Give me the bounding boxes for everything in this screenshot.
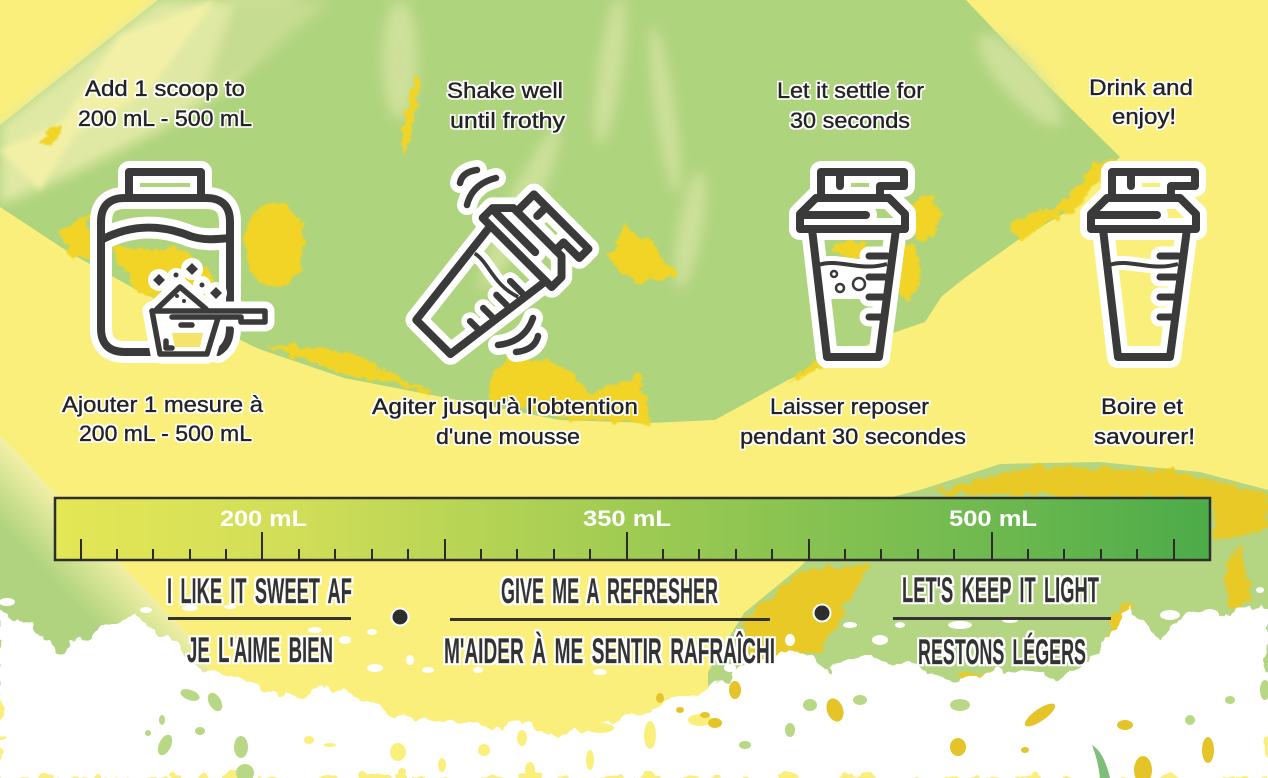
text: step 4 English: enjoy! — [1112, 104, 1176, 129]
background: green drip — [1092, 745, 1110, 778]
background: orange patches on peel — [38, 73, 1118, 423]
background: lime peel top — [0, 0, 1120, 423]
background: coloured splatter drops — [145, 680, 1268, 778]
taste label: light — [893, 571, 1111, 672]
step 3: settle — [740, 78, 966, 449]
taste label: refresher — [444, 572, 775, 671]
text: step 4 English — [1089, 75, 1193, 129]
icon: shaker with bubbles — [800, 172, 905, 357]
text: step 2 French: d'une mousse — [436, 424, 580, 449]
text: step 3 French — [740, 394, 966, 449]
taste label: sweet: JE L'AIME BIEN — [187, 631, 333, 670]
marker dot: left — [392, 608, 408, 626]
icon: jar with scoop — [101, 172, 265, 354]
text: step 2 English: until frothy — [450, 108, 565, 133]
taste label: refresher: GIVE ME A REFRESHER — [501, 572, 718, 611]
text: step 2 French — [372, 394, 638, 449]
taste label: light: RESTONS LÉGERS — [918, 632, 1086, 672]
label: 500 mL: 500 mL — [949, 506, 1037, 531]
marker dot: right — [814, 604, 830, 622]
ruler scale — [55, 498, 1210, 560]
text: step 1 English: Add 1 scoop to — [85, 76, 245, 101]
text: step 3 French: pendant 30 secondes — [740, 424, 966, 449]
background: pale streaks — [382, 0, 1074, 297]
background: lower right green peel — [708, 462, 1268, 700]
background: orange patches on lower peel — [740, 466, 1268, 700]
text: step 1 French: Ajouter 1 mesure à — [62, 392, 264, 417]
text: step 4 French: Boire et — [1101, 394, 1183, 419]
text: step 4 English: Drink and — [1089, 75, 1193, 100]
text: step 1 French: 200 mL - 500 mL — [79, 421, 252, 446]
background: white flecks — [0, 587, 1264, 675]
taste label: sweet: I LIKE IT SWEET AF — [167, 572, 352, 611]
taste label: refresher: M'AIDER À ME SENTIR RAFRAÎCHI — [444, 631, 775, 671]
text: step 3 English — [777, 78, 924, 133]
background: lower left green peel — [0, 435, 215, 700]
text: step 4 French — [1094, 394, 1195, 449]
label: 350 mL: 350 mL — [583, 506, 671, 531]
text: step 1 French — [62, 392, 264, 446]
background: pale left edge of peel — [0, 0, 300, 205]
text: step 3 French: Laisser reposer — [770, 394, 929, 419]
icon: tilted shaker — [398, 170, 589, 371]
background: white splash — [0, 600, 1268, 778]
text: step 2 French: Agiter jusqu'à l'obtention — [372, 394, 638, 419]
text: step 3 English: Let it settle for — [777, 78, 924, 103]
text: step 3 English: 30 seconds — [790, 108, 910, 133]
text: step 2 English — [447, 78, 565, 133]
text: step 2 English: Shake well — [447, 78, 563, 103]
label: 200 mL: 200 mL — [220, 506, 307, 531]
icon: shaker — [1091, 172, 1196, 357]
step 2: shake — [372, 78, 638, 449]
step 4: drink — [1089, 75, 1196, 449]
text: step 4 French: savourer! — [1094, 424, 1195, 449]
taste label: sweet — [167, 572, 352, 670]
text: step 1 English — [78, 76, 252, 131]
text: step 1 English: 200 mL - 500 mL — [78, 106, 252, 131]
ruler tick marks — [81, 532, 1174, 560]
step 1: add scoop — [62, 76, 265, 446]
taste label: light: LET'S KEEP IT LIGHT — [902, 571, 1099, 610]
